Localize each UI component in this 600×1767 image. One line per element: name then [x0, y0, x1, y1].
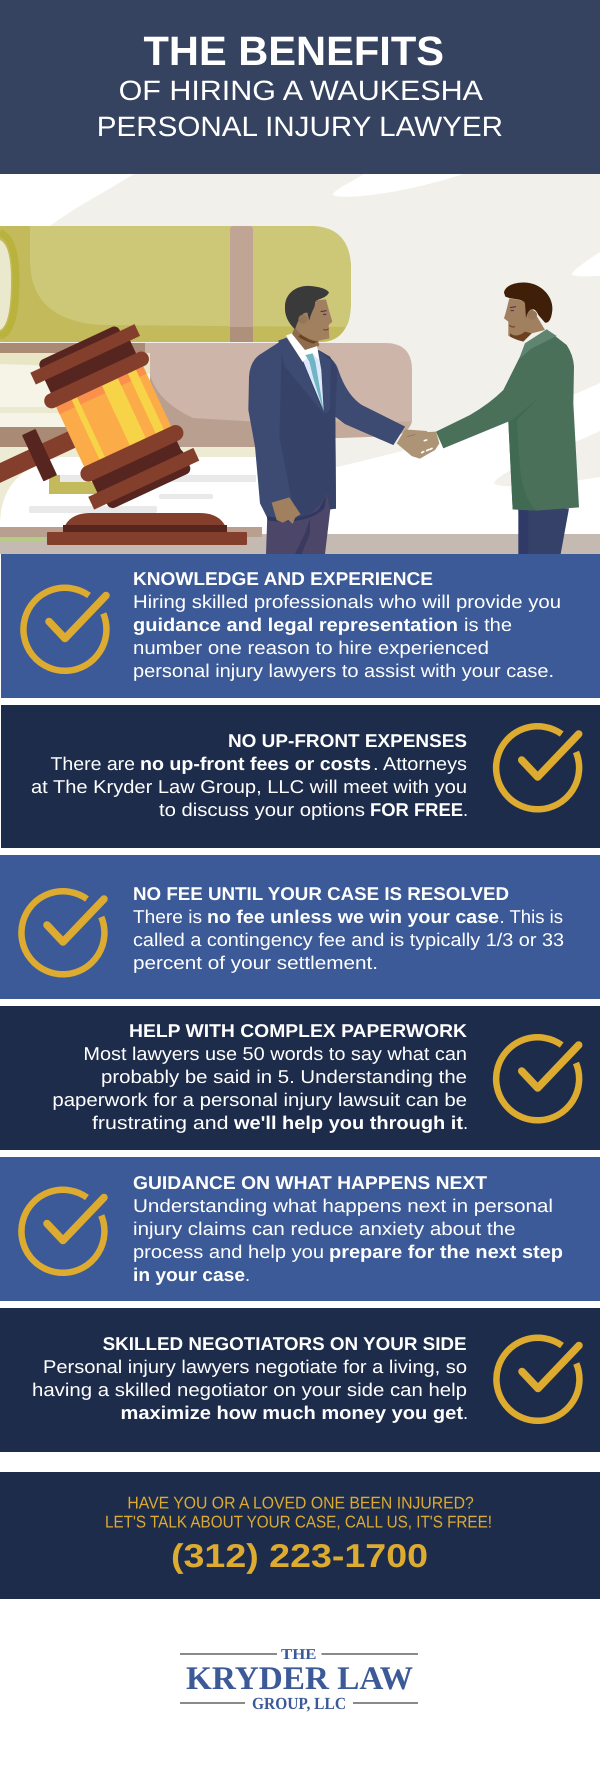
icon: gold check circle — [23, 588, 106, 671]
panel text: Personal injury lawyers negotiate for a living, so — [43, 1356, 467, 1377]
illustration: gavel, law books and handshake — [0, 174, 600, 564]
ground — [0, 534, 600, 554]
logo: The Kryder Law Group, LLC: THE — [281, 1647, 316, 1663]
panel text: we'll help you through it — [233, 1112, 463, 1133]
panel text: in your case — [133, 1264, 245, 1285]
panel text: FOR FREE — [370, 799, 463, 820]
panel text: . — [463, 1112, 468, 1133]
panel text: There is — [133, 906, 202, 927]
panel text: number one reason to hire experienced — [133, 637, 489, 658]
title: PERSONAL INJURY LAWYER — [97, 111, 503, 142]
icon: gold check circle — [21, 1190, 104, 1273]
icon: gold check circle — [496, 1037, 579, 1120]
title — [97, 28, 503, 142]
panel text: Most lawyers use 50 words to say what can — [83, 1043, 467, 1064]
panel text: percent of your settlement. — [133, 952, 378, 973]
logo: The Kryder Law Group, LLC — [180, 1647, 418, 1713]
call to action bar — [0, 1472, 600, 1599]
panel text: frustrating and — [92, 1112, 228, 1133]
title: THE BENEFITS — [144, 28, 444, 74]
panel text: prepare for the next step — [329, 1241, 563, 1262]
panel text: NO FEE UNTIL YOUR CASE IS RESOLVED — [133, 883, 509, 904]
panel text: maximize how much money you get — [120, 1402, 463, 1423]
panel: skilled negotiators — [0, 1308, 600, 1452]
panel text: to discuss your options — [159, 799, 365, 820]
panel: no fee until resolved — [0, 855, 600, 999]
call to action text: LET'S TALK ABOUT YOUR CASE, CALL US, IT'S FREE! — [105, 1512, 492, 1532]
panel text: guidance and legal representation — [133, 614, 458, 635]
header banner — [0, 0, 600, 174]
panel text — [31, 730, 468, 820]
panel text: called a contingency fee and is typically 1/3 or 33 — [133, 929, 564, 950]
law books — [0, 226, 412, 538]
panel text: HELP WITH COMPLEX PAPERWORK — [129, 1020, 468, 1041]
icon: gold check circle — [496, 726, 579, 809]
panel text: SKILLED NEGOTIATORS ON YOUR SIDE — [103, 1333, 467, 1354]
panel text: . This is — [500, 906, 563, 927]
panel: no up-front expenses — [1, 705, 600, 848]
panel text: is the — [464, 614, 512, 635]
panel text — [133, 1172, 563, 1285]
icon: gold check circle — [21, 891, 104, 974]
panel text: probably be said in 5. Understanding the — [101, 1066, 467, 1087]
panel text: injury claims can reduce anxiety about the — [133, 1218, 516, 1239]
logo: The Kryder Law Group, LLC: GROUP, LLC — [252, 1694, 346, 1713]
client in green jacket — [407, 282, 579, 554]
panel text: GUIDANCE ON WHAT HAPPENS NEXT — [133, 1172, 488, 1193]
panel text: . — [463, 799, 468, 820]
panel text: no up-front fees or costs — [140, 753, 371, 774]
panel text — [133, 568, 561, 681]
panel text: Understanding what happens next in personal — [133, 1195, 553, 1216]
panel text: NO UP-FRONT EXPENSES — [228, 730, 467, 751]
panel text: paperwork for a personal injury lawsuit can be — [52, 1089, 467, 1110]
panel text: no fee unless we win your case — [207, 906, 499, 927]
title: OF HIRING A WAUKESHA — [119, 75, 483, 106]
panel text: KNOWLEDGE AND EXPERIENCE — [133, 568, 433, 589]
panel text — [133, 883, 564, 973]
call to action text: HAVE YOU OR A LOVED ONE BEEN INJURED? — [127, 1494, 474, 1513]
gavel — [0, 317, 247, 564]
panel text: process and help you — [133, 1241, 324, 1262]
icon: gold check circle — [496, 1338, 579, 1421]
panel text: at The Kryder Law Group, LLC will meet with you — [31, 776, 467, 797]
panel: help with complex paperwork — [0, 1006, 600, 1150]
panel text — [32, 1333, 468, 1423]
panel: knowledge and experience — [1, 554, 600, 698]
panel text: having a skilled negotiator on your side can help — [32, 1379, 467, 1400]
panel text: Hiring skilled professionals who will provide you — [133, 591, 561, 612]
panel text: . Attorneys — [373, 753, 467, 774]
panel text: . — [245, 1264, 250, 1285]
businessman in navy suit — [248, 286, 439, 554]
panel text: . — [463, 1402, 468, 1423]
panel text: There are — [50, 753, 135, 774]
panel text: personal injury lawyers to assist with your case. — [133, 660, 554, 681]
phone number: (312) 223-1700 — [171, 1537, 428, 1574]
panel text — [52, 1020, 468, 1133]
logo: The Kryder Law Group, LLC: KRYDER LAW — [186, 1661, 413, 1697]
panel: guidance on what happens next — [0, 1157, 600, 1301]
call to action text — [105, 1494, 492, 1532]
